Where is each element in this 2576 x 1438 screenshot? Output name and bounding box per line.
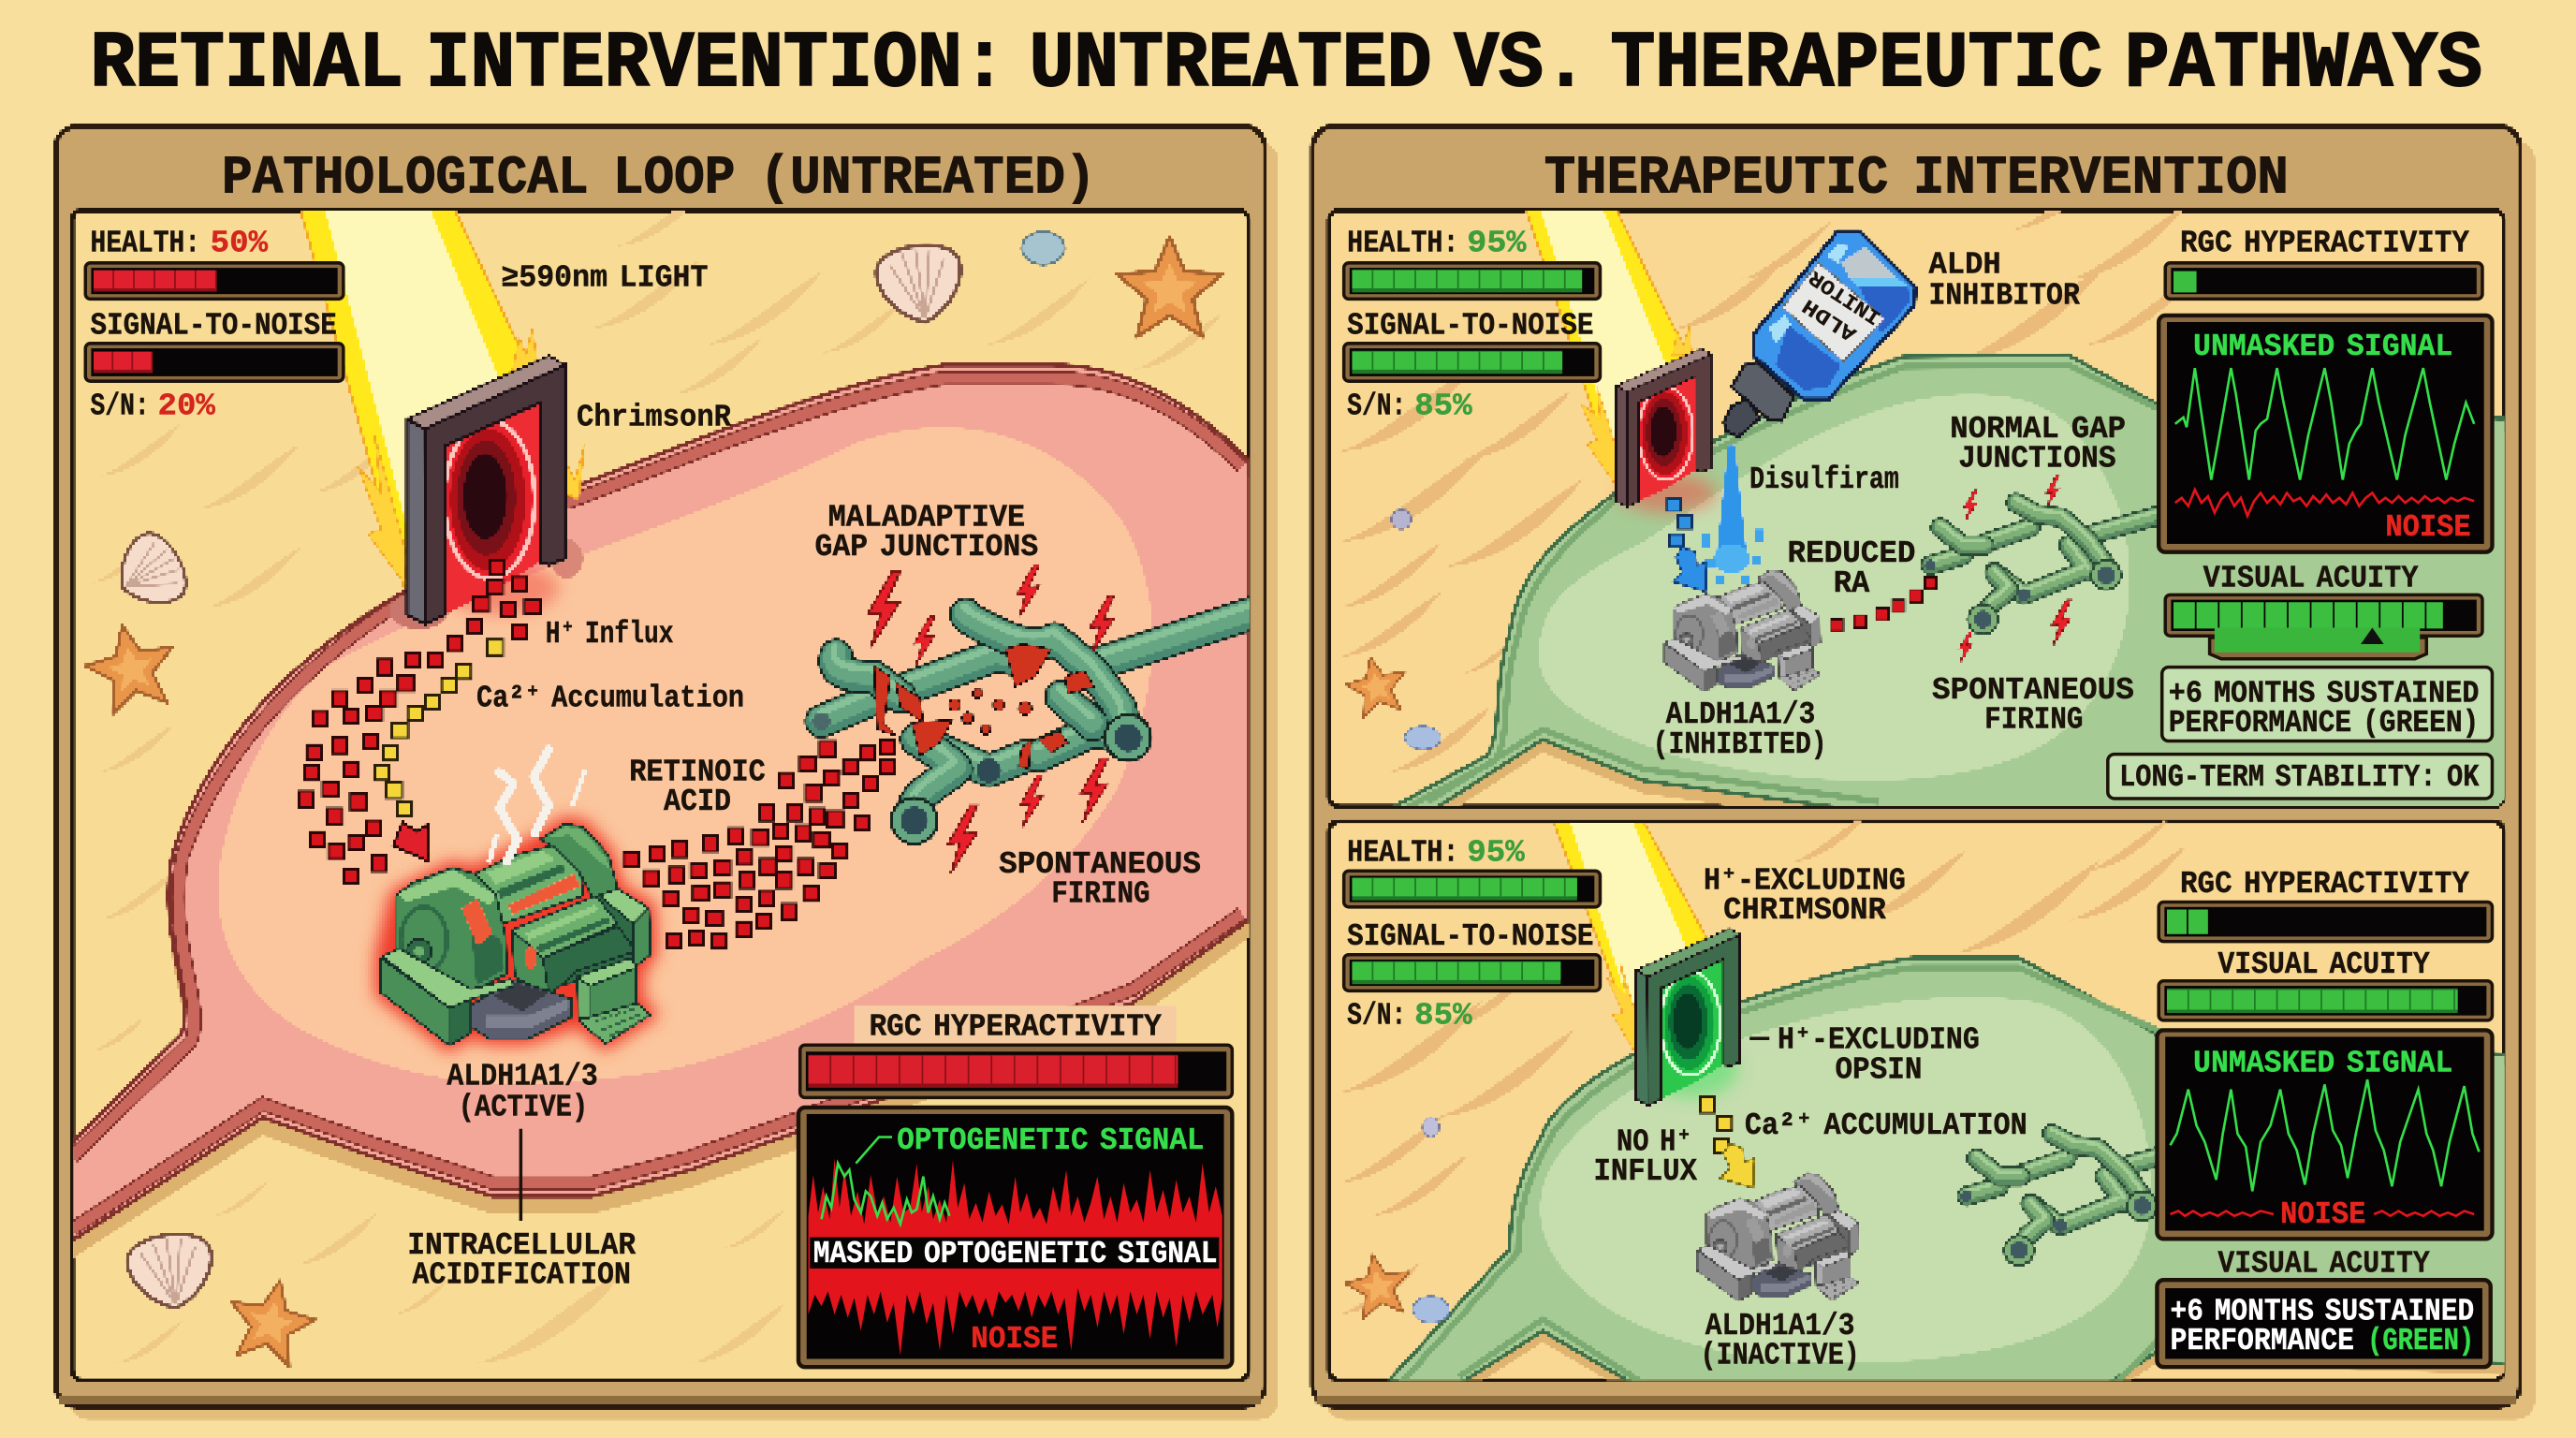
- label: maladaptive gap junctions: GAP JUNCTIONS: [815, 530, 1038, 565]
- spontaneous firing bolts: [1958, 476, 2071, 663]
- cell core: [1539, 394, 2130, 781]
- signal trace: [2175, 368, 2474, 479]
- label: enzyme active: [446, 1059, 598, 1126]
- label: enzyme inhibited: (INHIBITED): [1653, 727, 1827, 763]
- normal gap junction pipes: [1925, 498, 2169, 634]
- label: intracellular acidification: [407, 1228, 636, 1294]
- label: normal gap junctions: NORMAL GAP: [1950, 412, 2126, 448]
- light beam: [300, 211, 585, 588]
- arrow into enzyme: [393, 822, 429, 861]
- S/N readout: 85%: [1414, 998, 1473, 1034]
- label: no H+ influx: NO H⁺: [1617, 1125, 1692, 1161]
- damage on the junctions: [874, 644, 1094, 769]
- optogenetic signal trace: [822, 1164, 949, 1225]
- S/N readout: [91, 389, 216, 424]
- label: intracellular acidification: ACIDIFICATION: [413, 1258, 631, 1294]
- health bar: [1344, 263, 1600, 299]
- RGC hyperactivity label: RGC HYPERACTIVITY: [869, 1010, 1162, 1046]
- label: ALDH inhibitor: [1928, 247, 2080, 315]
- label: ALDH inhibitor: ALDH: [1928, 247, 2001, 283]
- cell core cytoplasm: [218, 428, 1152, 1084]
- heading: pathological loop: PATHOLOGICAL LOOP (UNTREATED): [222, 148, 1096, 209]
- label: spontaneous firing: SPONTANEOUS: [999, 847, 1201, 883]
- label: maladaptive gap junctions: [815, 501, 1038, 565]
- health bar: [85, 263, 344, 299]
- label: H+ influx: H⁺ Influx: [546, 617, 674, 653]
- callout: sustained performance: PERFORMANCE (GREEN): [2169, 706, 2479, 741]
- label: H+-excluding ChrimsonR: CHRIMSONR: [1723, 893, 1886, 929]
- label: spontaneous firing: [999, 847, 1201, 913]
- label: enzyme inhibited: [1653, 697, 1827, 763]
- calcium particles: [1701, 1097, 1733, 1153]
- RGC hyperactivity label: RGC HYPERACTIVITY: [2180, 227, 2469, 262]
- machine glow: [381, 823, 651, 1045]
- health label and value: HEALTH:: [1347, 227, 1459, 262]
- machine: ALDH1A1/3 active: [381, 824, 651, 1046]
- callout: long-term stability: LONG-TERM STABILITY: OK: [2119, 760, 2479, 796]
- shells and starfish: [79, 231, 1222, 1370]
- label: Ca2+ accumulation: Ca²⁺ Accumulation: [476, 682, 744, 717]
- spontaneous firing bolts: [868, 565, 1114, 873]
- noise label: NOISE: [2385, 510, 2471, 546]
- signal-to-noise bar: [85, 344, 344, 381]
- label: enzyme active: (ACTIVE): [459, 1091, 588, 1126]
- label: intracellular acidification: INTRACELLULAR: [407, 1228, 636, 1264]
- label: enzyme inactive: [1701, 1309, 1860, 1374]
- sub-panel: bottom treatment column: [1344, 836, 2492, 1374]
- label: reduced RA: [1788, 536, 1915, 602]
- health label and value: 95%: [1467, 836, 1526, 872]
- blue arrow: [1673, 547, 1707, 592]
- yellow arrow: [1720, 1144, 1754, 1188]
- S/N readout: 85%: [1414, 389, 1473, 424]
- noise waveform: [809, 1158, 1222, 1356]
- heading: therapeutic intervention: THERAPEUTIC INTERVENTION: [1544, 148, 2289, 209]
- H+ and Ca2+ particle stream: [299, 560, 540, 884]
- health label and value: 95%: [1467, 227, 1528, 262]
- noise trace right: [2374, 1211, 2474, 1216]
- title: RETINAL INTERVENTION: UNTREATED VS. THERAPEUTIC PATHWAYS: [91, 21, 2482, 110]
- S/N readout: S/N:: [91, 389, 150, 424]
- label: normal gap junctions: JUNCTIONS: [1958, 441, 2116, 477]
- portal glow: [1647, 1038, 1738, 1097]
- cell membrane shadow: [73, 477, 1250, 1258]
- signal-to-noise bar: [1344, 344, 1600, 381]
- RGC hyperactivity bar: [2159, 902, 2492, 942]
- label: retinoic acid: ACID: [664, 785, 731, 820]
- label: Ca2+ accumulation: Ca²⁺ ACCUMULATION: [1745, 1108, 2027, 1144]
- label: H+-excluding opsin: [1749, 1023, 1980, 1088]
- S/N readout: S/N:: [1347, 998, 1406, 1034]
- panel: pathological loop (untreated): [56, 126, 1278, 1419]
- label: spontaneous firing: SPONTANEOUS: [1932, 673, 2134, 709]
- machine: inactive enzyme: [1697, 1173, 1859, 1301]
- health label and value: 50%: [211, 227, 269, 262]
- noise trace: [2175, 490, 2474, 516]
- cell core: [1540, 997, 2152, 1363]
- label: reduced RA: RA: [1834, 566, 1869, 602]
- label: retinoic acid: [629, 756, 766, 820]
- blue particles: [1667, 498, 1691, 547]
- label: no H+ influx: INFLUX: [1593, 1154, 1697, 1190]
- noise trace left: [2170, 1211, 2274, 1216]
- label: no H+ influx: [1593, 1125, 1697, 1190]
- bottle label text: ALDH: [1798, 294, 1861, 345]
- reduced retinoic acid particles: [1831, 578, 1937, 632]
- cell body: H+-excluding neuron: [1382, 958, 2513, 1388]
- scope label: optogenetic signal: OPTOGENETIC SIGNAL: [897, 1123, 1204, 1159]
- panel: therapeutic intervention: [1312, 126, 2535, 1419]
- portal: ChrimsonR channel: [407, 356, 564, 624]
- label: enzyme inactive: ALDH1A1/3: [1705, 1309, 1855, 1344]
- label: normal gap junctions: [1950, 412, 2126, 477]
- scope label: masked signal: MASKED OPTOGENETIC SIGNAL: [813, 1237, 1218, 1272]
- label: ALDH inhibitor: INHIBITOR: [1928, 279, 2080, 315]
- cell body: pathological retinal neuron: [72, 365, 1249, 1240]
- cell body: treated neuron: [1382, 355, 2513, 814]
- light beam: [1526, 211, 1692, 493]
- steam: [490, 749, 585, 861]
- callout: sustained performance: [2157, 1280, 2491, 1367]
- leader line to acidification label: [520, 1129, 521, 1221]
- label: maladaptive gap junctions: MALADAPTIVE: [828, 501, 1025, 536]
- signal-to-noise label: SIGNAL-TO-NOISE: [1347, 919, 1593, 955]
- machine: inhibited enzyme: [1664, 570, 1821, 692]
- S/N readout: 20%: [157, 389, 216, 424]
- callout: sustained performance: +6 MONTHS SUSTAINED: [2170, 1294, 2474, 1329]
- label: reduced RA: REDUCED: [1788, 536, 1915, 572]
- health label and value: HEALTH:: [1347, 836, 1459, 872]
- health label and value: HEALTH:: [91, 227, 200, 262]
- label: H+-excluding opsin: H⁺-EXCLUDING: [1778, 1023, 1980, 1059]
- icon: disulfiram drop stream: [1702, 446, 1763, 583]
- label: enzyme active: ALDH1A1/3: [446, 1059, 598, 1094]
- signal trace: [2170, 1079, 2479, 1191]
- label: ChrimsonR: ChrimsonR: [577, 401, 731, 436]
- RGC hyperactivity bar: [2165, 263, 2482, 299]
- visual acuity label: VISUAL ACUITY: [2217, 947, 2430, 983]
- callout: sustained performance: [2162, 668, 2492, 741]
- S/N readout: [1347, 998, 1473, 1034]
- label: H+-excluding ChrimsonR: [1704, 864, 1906, 929]
- maladaptive gap junction pipes: [812, 600, 1268, 844]
- callout: sustained performance: +6 MONTHS SUSTAINED: [2169, 676, 2479, 712]
- bottle label text: INITOR: [1805, 265, 1885, 329]
- oscilloscope: masked optogenetic signal: [798, 1108, 1232, 1367]
- S/N readout: [1347, 389, 1473, 424]
- scope label: noise: NOISE: [971, 1322, 1058, 1357]
- cell shadow: [1382, 970, 2513, 1400]
- oscilloscope: unmasked signal: [2157, 1030, 2492, 1239]
- oscilloscope: unmasked signal: [2159, 315, 2492, 552]
- starfish and pebbles: [1340, 509, 1441, 749]
- visual acuity label: VISUAL ACUITY: [2203, 562, 2419, 597]
- scope label: UNMASKED SIGNAL: [2193, 1046, 2452, 1081]
- label: spontaneous firing: FIRING: [1051, 877, 1150, 913]
- RGC hyperactivity bar: [800, 1045, 1232, 1097]
- signal-to-noise label: SIGNAL-TO-NOISE: [1347, 308, 1593, 344]
- starfish and pebbles: [1340, 1117, 1449, 1323]
- icon: ALDH inhibitor bottle: [1724, 231, 1915, 437]
- label: H+-excluding ChrimsonR: H⁺-EXCLUDING: [1704, 864, 1906, 900]
- portal foot shadow and red glow: [389, 539, 583, 629]
- callout: sustained performance: (GREEN): [2367, 1324, 2474, 1359]
- bottle label text: [1798, 265, 1885, 345]
- noise label: NOISE: [2280, 1197, 2365, 1233]
- label: retinoic acid: RETINOIC: [629, 756, 766, 791]
- retinoic acid particles: [623, 739, 895, 949]
- signal-to-noise label: SIGNAL-TO-NOISE: [91, 308, 337, 344]
- visual acuity bar: [2159, 981, 2492, 1020]
- portal: ChrimsonR channel: [1617, 348, 1711, 506]
- visual acuity bar with indicator tab: [2165, 594, 2482, 659]
- label: enzyme inhibited: ALDH1A1/3: [1666, 697, 1815, 733]
- signal leader: [856, 1137, 892, 1164]
- callout: sustained performance: PERFORMANCE: [2170, 1324, 2354, 1359]
- label: spontaneous firing: FIRING: [1984, 703, 2083, 739]
- RGC hyperactivity label: RGC HYPERACTIVITY: [2180, 867, 2469, 902]
- label: H+-excluding opsin: OPSIN: [1835, 1052, 1922, 1088]
- signal-to-noise bar: [1344, 955, 1600, 990]
- label: light: ≥590nm LIGHT: [501, 260, 708, 296]
- gap junction pipes: [1961, 1129, 2204, 1265]
- portal: H+-excluding ChrimsonR: [1636, 929, 1740, 1106]
- S/N readout: S/N:: [1347, 389, 1406, 424]
- sub-panel: top treatment column: [1344, 227, 2492, 799]
- cell shadow: [1382, 368, 2513, 827]
- portal glow: [1618, 473, 1717, 513]
- label: enzyme inactive: (INACTIVE): [1701, 1339, 1860, 1374]
- light beam: [1554, 823, 1710, 1055]
- scope label: UNMASKED SIGNAL: [2193, 330, 2452, 365]
- label: disulfiram: Disulfiram: [1749, 462, 1899, 498]
- second visual acuity label: VISUAL ACUITY: [2217, 1246, 2430, 1282]
- label: spontaneous firing: [1932, 673, 2134, 739]
- health bar: [1344, 871, 1600, 907]
